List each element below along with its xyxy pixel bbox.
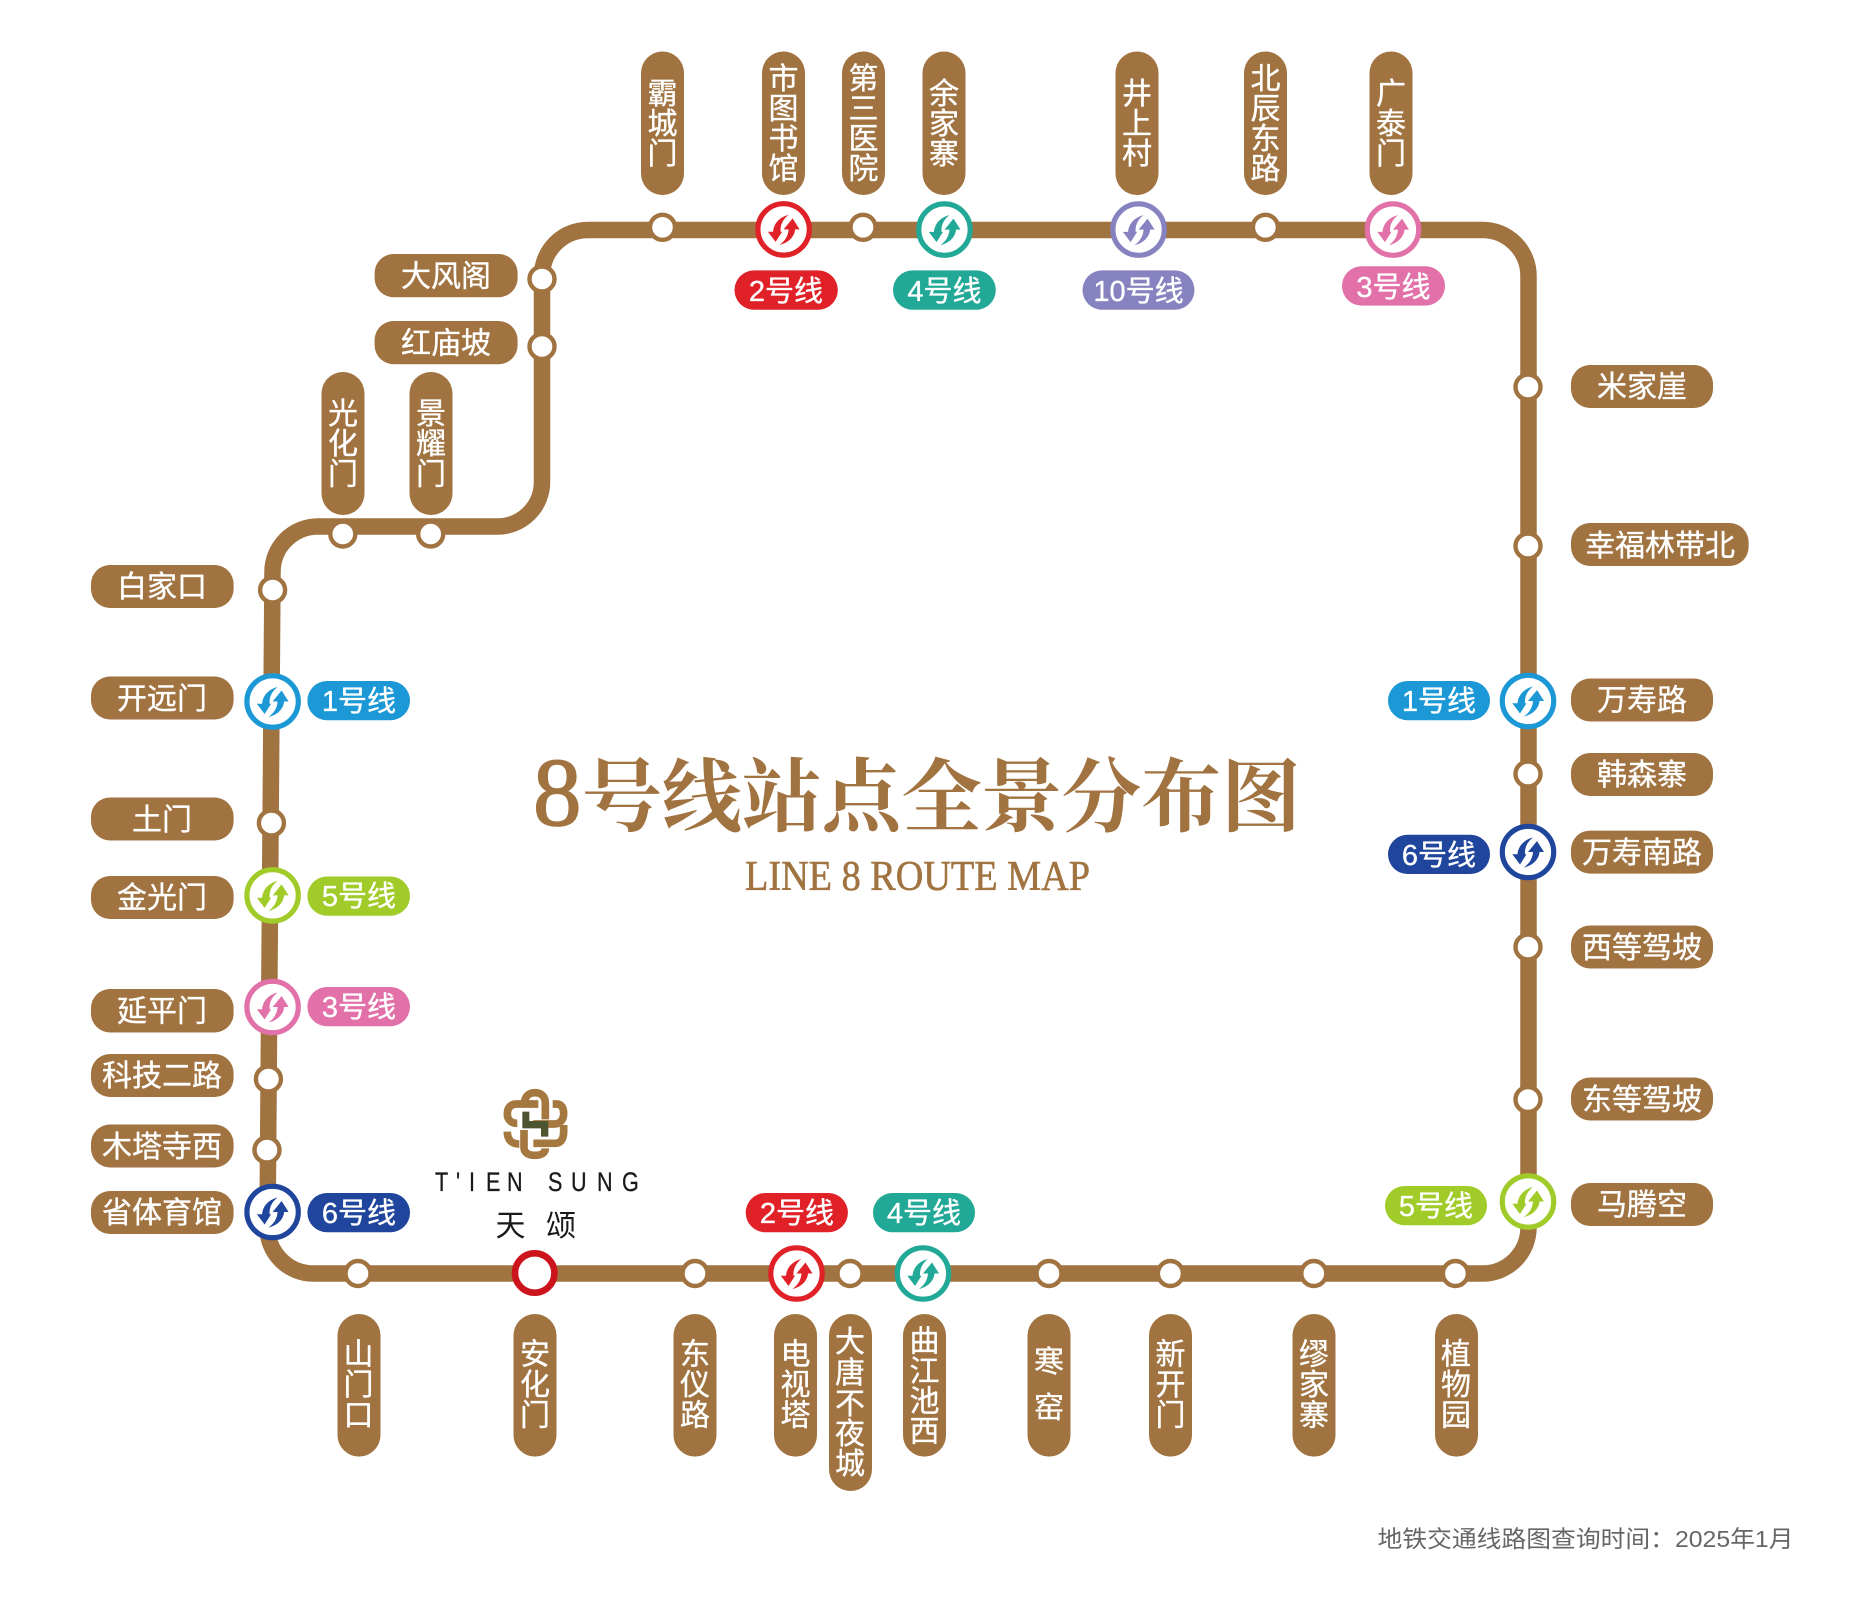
station: 光化门: 化 [328,428,358,461]
interchange: 金光门 line 5: 金光门 [117,882,207,915]
station: 东仪路: 东 [680,1338,710,1372]
logo: Tien Sung [435,1093,639,1243]
title: 号线站点全景分布图 [582,755,1301,843]
interchange: 马腾空 line 5: 马腾空 [1597,1189,1687,1222]
interchange: 余家寨 line 4: 4号线 [907,275,982,308]
interchange: 余家寨 line 4 [893,52,996,310]
station: 科技二路 [91,1054,281,1097]
station: 植物园 [1435,1261,1478,1457]
interchange: 曲江池西 line 4: 曲 [910,1326,940,1358]
station: 西等驾坡: 西等驾坡 [1582,932,1702,965]
station: 安化门 (highlight): 门 [520,1400,550,1432]
interchange: 市图书馆 line 2: 市 [768,63,798,96]
interchange: 曲江池西 line 4: 池 [910,1386,940,1418]
interchange: 广泰门 line 3: 泰 [1376,108,1406,141]
interchange: 广泰门 line 3: 门 [1376,138,1406,171]
station: 北辰东路: 东 [1250,123,1280,156]
station: 景耀门 [410,372,452,546]
station: 山门口 [338,1261,380,1457]
station: 第三医院 [842,52,885,240]
station: 霸城门: 城 [648,108,678,141]
title: 8 [533,739,582,846]
station: 红庙坡: 红庙坡 [401,328,491,360]
station: 东仪路: 仪 [680,1369,710,1402]
interchange: 广泰门 line 3 [1342,52,1445,306]
interchange: 延平门 line 3: 3号线 [322,991,396,1024]
station: 寒窑 [1028,1261,1070,1457]
station: 新开门 [1149,1261,1192,1457]
subtitle: LINE 8 ROUTE MAP [745,853,1090,900]
station: 霸城门 [641,52,684,240]
station: 米家崖 [1516,365,1713,408]
station: 科技二路: 科技二路 [102,1060,222,1093]
station: 东仪路 [674,1261,716,1457]
interchange: 电视塔 line 2: 电 [780,1338,810,1372]
interchange: 金光门 line 5: 5号线 [322,880,396,913]
interchange: 金光门 line 5 [91,870,410,921]
station: 北辰东路: 路 [1250,153,1280,186]
station: 土门: 土门 [132,804,192,837]
station: 第三医院: 第 [848,63,878,96]
station: 霸城门: 门 [648,138,678,171]
interchange: 省体育馆 line 6 [91,1186,410,1238]
interchange: 电视塔 line 2: 塔 [780,1400,810,1432]
interchange: 省体育馆 line 6: 省体育馆 [102,1197,222,1230]
station: 植物园: 物 [1441,1369,1471,1402]
station: 大唐不夜城: 不 [835,1388,865,1421]
interchange: 广泰门 line 3: 3号线 [1356,271,1431,304]
station: 东等驾坡 [1516,1078,1713,1120]
interchange: 市图书馆 line 2: 书 [768,123,798,156]
interchange: 开远门 line 1: 开远门 [117,683,207,716]
interchange: 余家寨 line 4: 家 [929,108,959,141]
interchange: 曲江池西 line 4: 4号线 [887,1197,961,1230]
station: 米家崖: 米家崖 [1597,371,1687,404]
interchange: 井上村 line 10: 上 [1122,108,1152,141]
interchange: 曲江池西 line 4 [873,1193,975,1457]
station: 东等驾坡: 东等驾坡 [1582,1084,1702,1117]
station: 山门口: 山 [344,1338,374,1372]
station: 大风阁 [375,254,554,297]
footer note: 地铁交通线路图查询时间：2025年1月 [1378,1526,1794,1552]
interchange: 井上村 line 10: 井 [1122,78,1152,111]
logo chinese name: 天颂 [496,1210,576,1243]
station: 大唐不夜城: 唐 [835,1357,865,1390]
interchange: 电视塔 line 2: 2号线 [760,1197,834,1230]
station: 安化门 (highlight): 化 [520,1369,550,1402]
station: 大风阁: 大风阁 [401,260,491,294]
station: 光化门: 光 [328,398,358,431]
station: 第三医院: 医 [848,123,878,156]
station: 山门口: 口 [344,1400,374,1432]
interchange: 井上村 line 10 [1082,52,1194,310]
station: 安化门 (highlight): 安 [520,1338,550,1372]
station: 韩森寨 [1516,753,1713,796]
interchange: 市图书馆 line 2: 馆 [768,153,798,186]
interchange: 曲江池西 line 4: 西 [910,1416,940,1448]
station: 北辰东路 [1244,52,1287,240]
interchange: 井上村 line 10: 10号线 [1093,275,1184,308]
interchange: 电视塔 line 2: 视 [780,1369,810,1402]
station: 缪家寨: 寨 [1299,1400,1329,1432]
interchange: 延平门 line 3: 延平门 [117,996,207,1028]
station: 大唐不夜城: 大 [835,1326,865,1359]
station: 缪家寨: 缪 [1299,1338,1329,1372]
station: 土门 [91,798,284,840]
interchange: 马腾空 line 5: 5号线 [1399,1190,1473,1223]
station: 东仪路: 路 [680,1400,710,1432]
station: 霸城门: 霸 [648,78,678,111]
station: 红庙坡 [375,321,554,364]
station: 北辰东路: 北 [1250,63,1280,96]
interchange: 市图书馆 line 2: 图 [768,93,798,126]
station: 第三医院: 三 [848,93,878,126]
interchange: 市图书馆 line 2: 2号线 [749,275,823,308]
station: 寒窑: 窑 [1034,1392,1064,1425]
station: 缪家寨: 家 [1299,1369,1329,1402]
interchange: 万寿南路 line 6: 6号线 [1402,839,1476,872]
logo latin name: T'IEN SUNG [435,1168,639,1198]
station: 大唐不夜城 [829,1261,872,1491]
station: 木塔寺西 [91,1124,280,1168]
metro line 8 route [268,230,1528,1274]
station: 木塔寺西: 木塔寺西 [102,1131,222,1164]
interchange: 省体育馆 line 6: 6号线 [322,1197,396,1230]
station: 光化门: 门 [328,458,358,492]
station: 韩森寨: 韩森寨 [1597,759,1687,792]
station: 新开门: 门 [1156,1400,1186,1432]
station: 新开门: 新 [1156,1338,1186,1372]
station: 植物园: 植 [1441,1338,1471,1372]
interchange: 曲江池西 line 4: 江 [910,1356,940,1388]
station: 景耀门: 景 [416,398,446,431]
station: 景耀门: 门 [416,458,446,492]
station: 大唐不夜城: 夜 [835,1418,865,1451]
station: 山门口: 门 [344,1369,374,1402]
logo mark [507,1093,564,1155]
station: 幸福林带北 [1516,523,1749,566]
station: 景耀门: 耀 [416,428,446,461]
interchange: 市图书馆 line 2 [734,52,838,310]
interchange: 马腾空 line 5 [1385,1176,1713,1227]
interchange: 万寿路 line 1 [1388,675,1713,727]
interchange: 广泰门 line 3: 广 [1376,78,1406,111]
interchange: 余家寨 line 4: 余 [929,78,959,111]
interchange: 万寿路 line 1: 万寿路 [1597,684,1687,718]
interchange: 余家寨 line 4: 寨 [929,138,959,171]
interchange: 万寿路 line 1: 1号线 [1402,685,1476,718]
interchange: 延平门 line 3 [91,981,410,1033]
interchange: 井上村 line 10: 村 [1122,138,1152,171]
interchange: 万寿南路 line 6 [1388,826,1713,878]
station: 光化门 [322,372,364,546]
station: 缪家寨 [1292,1261,1336,1457]
station: 寒窑: 寒 [1034,1346,1064,1379]
station: 新开门: 开 [1156,1369,1186,1402]
station: 安化门 (highlight) [514,1253,556,1457]
station: 西等驾坡 [1516,926,1713,968]
station: 大唐不夜城: 城 [835,1448,865,1481]
station: 植物园: 园 [1441,1400,1471,1432]
interchange: 电视塔 line 2 [746,1193,848,1457]
station: 幸福林带北: 幸福林带北 [1585,530,1735,563]
station: 白家口 [91,565,285,608]
interchange: 开远门 line 1: 1号线 [322,685,396,718]
station: 北辰东路: 辰 [1250,93,1280,126]
interchange: 万寿南路 line 6: 万寿南路 [1582,837,1702,870]
station: 白家口: 白家口 [117,571,207,604]
station: 第三医院: 院 [848,153,878,186]
interchange: 开远门 line 1 [91,676,410,727]
